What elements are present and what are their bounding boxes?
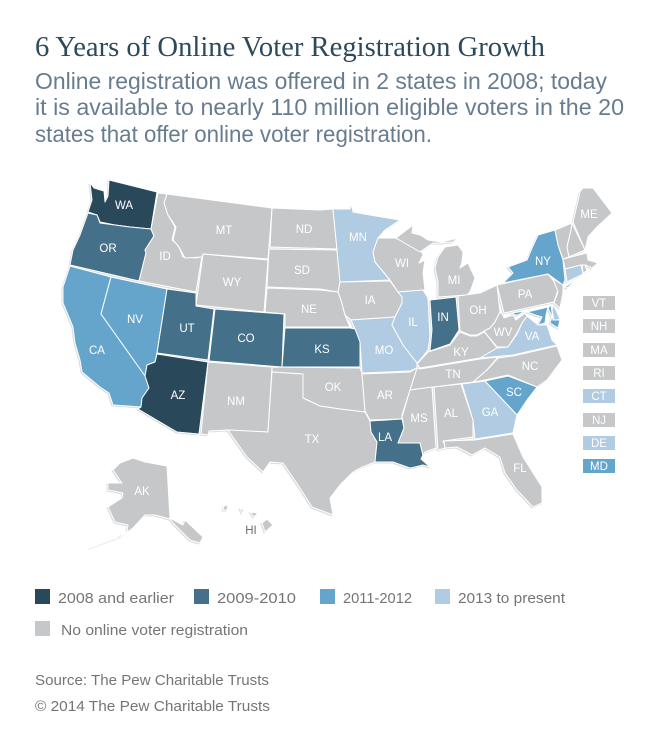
state labels: MN xyxy=(349,232,367,244)
state: MS xyxy=(398,387,436,455)
state labels: MO xyxy=(375,345,393,357)
state labels: IA xyxy=(365,295,376,307)
key: NJ xyxy=(583,413,615,427)
state: MD eastern shore xyxy=(548,305,560,328)
state: OH xyxy=(458,285,500,335)
state labels: SC xyxy=(506,387,522,399)
subtitle: it is available to nearly 110 million eligible voters in the 20 xyxy=(35,94,624,120)
state labels: KY xyxy=(453,347,469,359)
state labels: OK xyxy=(325,382,342,394)
state: WV xyxy=(484,312,527,347)
state: HI xyxy=(223,505,273,532)
legend xyxy=(35,589,566,639)
key: RI: RI xyxy=(593,368,605,380)
state labels: NM xyxy=(227,396,245,408)
subtitle xyxy=(35,68,624,147)
key: MD: MD xyxy=(590,461,608,473)
subtitle: Online registration was offered in 2 states in 2008; today xyxy=(35,68,607,94)
state labels: TX xyxy=(305,434,320,446)
state labels: PA xyxy=(518,289,533,301)
state labels: CA xyxy=(89,345,105,357)
key: CT: CT xyxy=(591,391,607,403)
legend: 2009-2010 xyxy=(194,589,296,607)
state labels: GA xyxy=(482,407,499,419)
state: NY Long Island xyxy=(565,278,579,288)
state labels: CO xyxy=(237,333,255,345)
state: WI xyxy=(373,238,425,292)
key: NJ: NJ xyxy=(592,415,606,427)
state labels: ME xyxy=(580,209,598,221)
legend: 2011-2012: 2011-2012 xyxy=(343,590,412,607)
state: CT xyxy=(565,265,583,282)
state: LA xyxy=(370,419,430,468)
state: TN xyxy=(410,357,498,390)
legend: 2009-2010: 2009-2010 xyxy=(217,590,296,607)
state: NJ xyxy=(553,279,563,308)
state labels: WV xyxy=(494,327,513,339)
state: OK xyxy=(272,367,365,412)
state labels: LA xyxy=(378,432,392,444)
state: NV xyxy=(101,277,167,376)
state: WY xyxy=(196,254,268,312)
key: DE: DE xyxy=(591,438,607,450)
state: NY xyxy=(503,230,565,285)
state: MO xyxy=(351,317,417,373)
state labels: KS xyxy=(314,344,330,356)
title: 6 Years of Online Voter Registration Growth xyxy=(35,32,545,63)
state labels: AL xyxy=(444,408,459,420)
key: RI xyxy=(583,366,615,380)
legend: 2011-2012 xyxy=(320,589,412,607)
state labels: NE xyxy=(301,304,317,316)
state labels: HI xyxy=(245,525,257,537)
state labels: MS xyxy=(410,413,428,425)
state: SC xyxy=(485,376,537,415)
state: MN xyxy=(333,205,400,282)
state labels: NY xyxy=(535,256,551,268)
state labels: TN xyxy=(445,369,461,381)
key: MD xyxy=(583,459,615,473)
key: MA: MA xyxy=(590,345,608,357)
state: AR xyxy=(362,368,417,420)
state labels: WY xyxy=(223,277,242,289)
copyright: © 2014 The Pew Charitable Trusts xyxy=(35,698,270,715)
state: ID xyxy=(139,193,202,292)
state labels: NV xyxy=(127,314,143,326)
state: GA xyxy=(462,381,517,439)
state: MA xyxy=(563,253,598,269)
state: TX xyxy=(228,372,377,515)
state labels: AZ xyxy=(171,390,185,402)
state: AZ xyxy=(138,354,208,434)
state: VT xyxy=(555,223,572,259)
state labels: AR xyxy=(377,390,393,402)
key: MA xyxy=(583,343,615,357)
state: VA xyxy=(480,316,557,358)
state: CO xyxy=(209,309,284,367)
state labels: VA xyxy=(525,331,540,343)
state: NE xyxy=(265,288,350,327)
key: NH: NH xyxy=(591,321,607,333)
state labels: WA xyxy=(115,200,133,212)
state: PA xyxy=(497,274,558,313)
state labels: WI xyxy=(395,258,409,270)
state: NC xyxy=(473,346,562,387)
state: MT xyxy=(164,194,272,259)
key: DE xyxy=(583,436,615,450)
state: IN xyxy=(430,297,459,351)
legend: no online voter registration: No online voter registration xyxy=(61,622,248,639)
state labels: SD xyxy=(294,265,310,277)
key: CT xyxy=(583,389,615,403)
state: RI xyxy=(582,265,587,273)
key: VT: VT xyxy=(592,298,606,310)
state: KS xyxy=(282,328,360,367)
state: ME xyxy=(573,188,612,250)
state labels: ND xyxy=(296,224,312,236)
legend: 2008 and earlier: 2008 and earlier xyxy=(58,590,174,607)
state: MI lower xyxy=(435,245,475,297)
state labels: NC xyxy=(522,361,538,373)
state: MD western shore xyxy=(527,307,548,325)
state: MI upper xyxy=(396,225,458,252)
state: AK xyxy=(90,458,203,548)
state: SD xyxy=(267,249,340,292)
state: FL xyxy=(444,434,542,507)
state labels: AK xyxy=(134,486,150,498)
state: NM xyxy=(201,362,272,435)
state: AL xyxy=(434,384,473,450)
state: DE xyxy=(552,305,560,321)
small-state key xyxy=(583,296,615,473)
state: IL xyxy=(392,290,430,363)
state labels: ID xyxy=(159,251,171,263)
state labels: IN xyxy=(437,312,449,324)
state: IA xyxy=(338,281,402,320)
state: WA xyxy=(88,180,157,229)
state: UT xyxy=(157,289,214,360)
state: NH xyxy=(567,223,585,257)
state: KY xyxy=(417,332,497,368)
state: MD west xyxy=(512,311,525,315)
key: VT xyxy=(583,296,615,310)
state: OR xyxy=(70,213,154,281)
key: NH xyxy=(583,319,615,333)
state labels: UT xyxy=(179,323,195,335)
legend: 2013 to present: 2013 to present xyxy=(458,590,566,607)
map of the United States xyxy=(63,180,612,548)
state labels: OR xyxy=(99,243,117,255)
state labels: IL xyxy=(408,317,418,329)
state: CA xyxy=(63,266,149,407)
state labels xyxy=(89,200,598,537)
state labels: MI xyxy=(448,275,460,287)
source: Source: The Pew Charitable Trusts xyxy=(35,672,269,689)
subtitle: states that offer online voter registration. xyxy=(35,121,432,147)
state labels: OH xyxy=(469,305,487,317)
state labels: MT xyxy=(216,225,232,237)
state: ND xyxy=(270,208,337,249)
state labels: FL xyxy=(513,463,527,475)
